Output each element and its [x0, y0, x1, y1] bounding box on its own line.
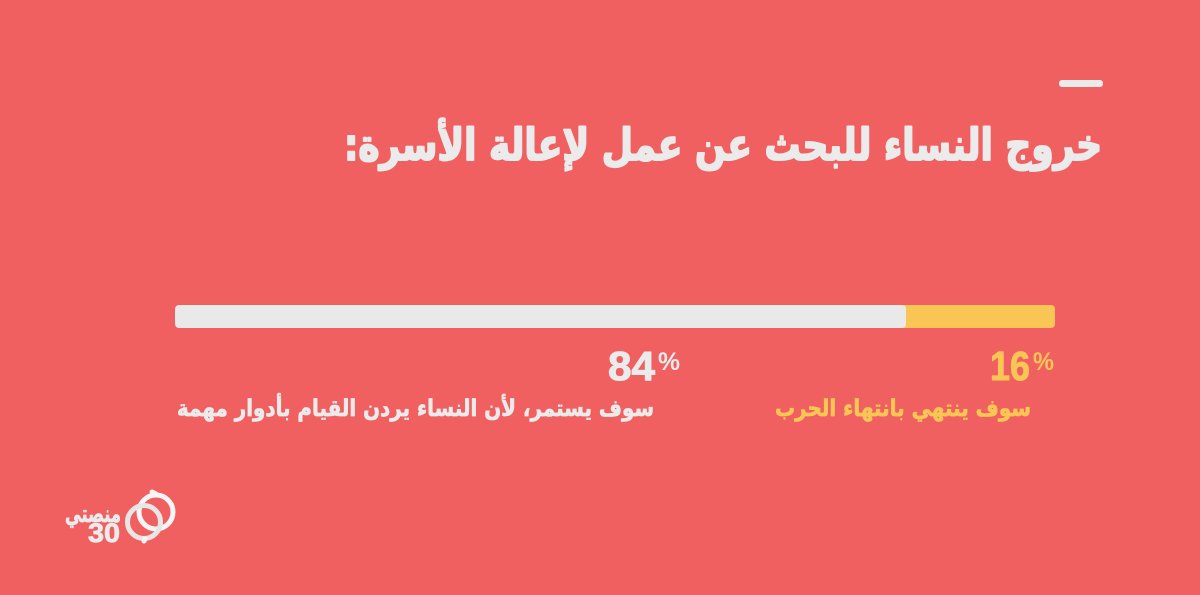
logo number: 30	[88, 518, 120, 548]
stat: 16 percent: %	[1033, 348, 1054, 376]
bar segment: 16% yellow	[890, 305, 1055, 328]
label: will continue: سوف يستمر، لأن النساء يردن القيام بأدوار مهمة	[177, 392, 654, 422]
label: ends with the war: سوف ينتهي بانتهاء الحرب	[775, 396, 1031, 422]
stat: 84 percent: %	[658, 348, 680, 376]
logo wordmark: منصتي	[65, 500, 121, 528]
logo	[65, 492, 173, 548]
stacked progress bar	[175, 305, 1055, 328]
stat: 84 percent	[608, 343, 680, 389]
stat: 16 percent: 16	[990, 343, 1030, 389]
stat: 84 percent: 84	[608, 343, 655, 389]
bar segment: 84% light grey	[175, 305, 906, 328]
heading accent bar	[1059, 80, 1103, 87]
logo icon: interlocking speech rings	[128, 492, 173, 541]
